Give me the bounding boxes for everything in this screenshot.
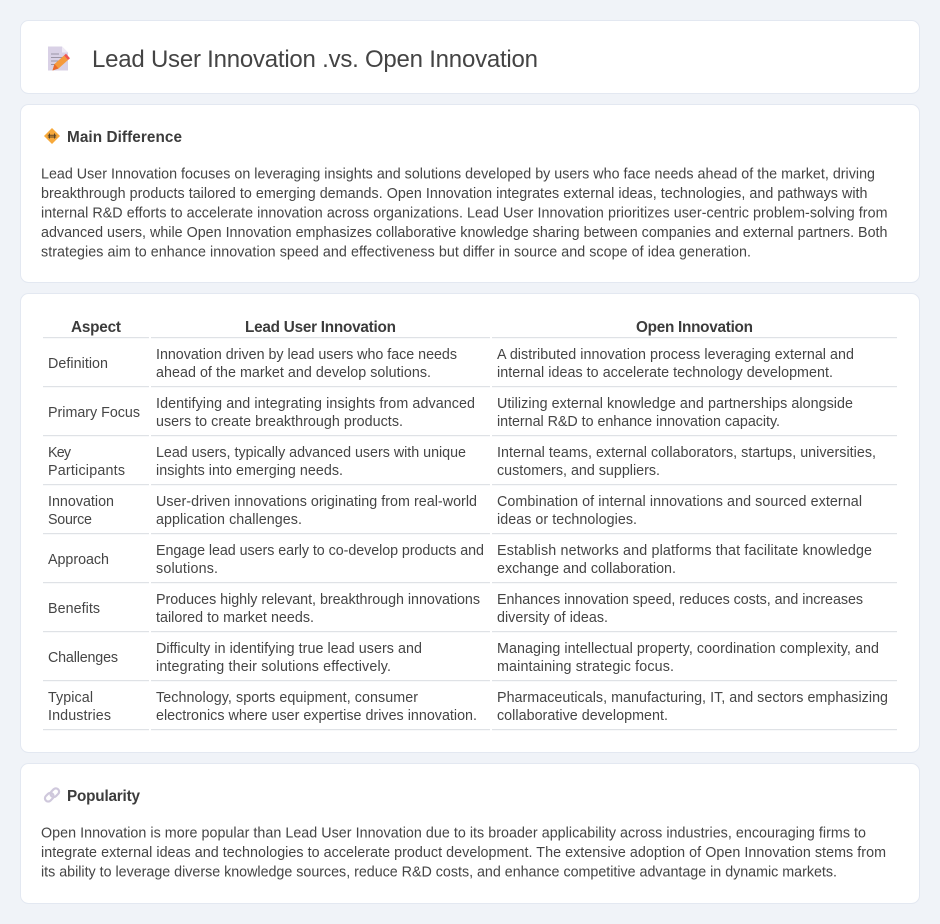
table row: approach bbox=[43, 543, 897, 583]
table row: definition bbox=[43, 347, 897, 387]
table row: typical industries bbox=[43, 690, 897, 730]
table row: typical industries: Pharmaceuticals, manufacturing, IT, and sectors emphasizing bbox=[497, 690, 888, 706]
text block: popularity: Open Innovation is more popular than Lead User Innovation due to its broader applicability across industries, encouraging firms to bbox=[41, 826, 866, 842]
table row: benefits: Benefits bbox=[48, 601, 100, 617]
table row: typical industries: Technology, sports equipment, consumer bbox=[156, 690, 418, 706]
text block: main difference: breakthrough products tailored to emerging demands. Open Innovation integrates external ideas, technologies, and pathways with bbox=[41, 186, 868, 202]
table row: key participants: insights into emerging needs. bbox=[156, 463, 343, 479]
table row: primary focus: Identifying and integrating insights from advanced bbox=[156, 396, 475, 412]
text block: popularity: integrate external ideas and technologies to accelerate product development. The extensive adoption of Open Innovation stems from bbox=[41, 845, 886, 861]
table row: innovation source: User-driven innovations originating from real-world bbox=[156, 494, 477, 510]
table row: benefits: Produces highly relevant, breakthrough innovations bbox=[156, 592, 480, 608]
text block: main difference: internal R&D efforts to accelerate innovation across organizations. Lead User Innovation prioritizes user-centric problem-solving from bbox=[41, 206, 888, 222]
table header row bbox=[43, 319, 897, 338]
text block: main difference bbox=[41, 166, 888, 260]
table row: definition: internal ideas to accelerate technology development. bbox=[497, 365, 833, 381]
text block: main difference: Lead User Innovation focuses on leveraging insights and solutions developed by users who face needs ahead of the market, driving bbox=[41, 166, 875, 182]
title: Lead User Innovation .vs. Open Innovation bbox=[92, 46, 538, 73]
table row: approach: Establish networks and platforms that facilitate knowledge bbox=[497, 543, 872, 559]
icon: document with pencil bbox=[48, 46, 70, 70]
table row: key participants: Key bbox=[48, 445, 72, 461]
heading: popularity: Popularity bbox=[67, 788, 140, 805]
table row: innovation source: Combination of internal innovations and sourced external bbox=[497, 494, 862, 510]
table row: challenges: Challenges bbox=[48, 650, 118, 666]
table row: typical industries: Typical bbox=[48, 690, 93, 706]
table row: primary focus: Utilizing external knowledge and partnerships alongside bbox=[497, 396, 853, 412]
table row: primary focus: internal R&D to enhance innovation capacity. bbox=[497, 414, 780, 430]
table row: key participants bbox=[43, 445, 897, 485]
table row: benefits: diversity of ideas. bbox=[497, 610, 608, 626]
table row: innovation source: ideas or technologies. bbox=[497, 512, 637, 528]
table row: benefits: Enhances innovation speed, reduces costs, and increases bbox=[497, 592, 863, 608]
table row: approach: exchange and collaboration. bbox=[497, 561, 676, 577]
heading: main difference: Main Difference bbox=[67, 129, 182, 146]
table row: key participants: customers, and suppliers. bbox=[497, 463, 660, 479]
table row: approach: Engage lead users early to co-develop products and bbox=[156, 543, 484, 559]
panel: comparison table bbox=[20, 294, 920, 752]
panel: popularity bbox=[20, 764, 920, 904]
table row: innovation source: Source bbox=[48, 512, 92, 528]
table row: challenges: integrating their solutions effectively. bbox=[156, 659, 391, 675]
table row: challenges bbox=[43, 641, 897, 681]
table row: typical industries: collaborative development. bbox=[497, 708, 668, 724]
table row: key participants: Internal teams, external collaborators, startups, universities, bbox=[497, 445, 876, 461]
text block: main difference: advanced users, while Open Innovation emphasizes collaborative knowledge sharing between companies and external partners. Both bbox=[41, 225, 888, 241]
panel: main difference bbox=[20, 104, 920, 282]
table row: approach: Approach bbox=[48, 552, 109, 568]
table row: challenges: Managing intellectual property, coordination complexity, and bbox=[497, 641, 879, 657]
table row: definition: ahead of the market and develop solutions. bbox=[156, 365, 431, 381]
table row: typical industries: electronics where user expertise drives innovation. bbox=[156, 708, 477, 724]
table row: approach: solutions. bbox=[156, 561, 218, 577]
table row: challenges: Difficulty in identifying true lead users and bbox=[156, 641, 422, 657]
text block: main difference: strategies aim to enhance innovation speed and effectiveness but differ in source and scope of idea generation. bbox=[41, 244, 751, 260]
table row: innovation source: Innovation bbox=[48, 494, 114, 510]
icon: chain link bbox=[44, 787, 60, 803]
table row: benefits: tailored to market needs. bbox=[156, 610, 314, 626]
table row: primary focus bbox=[43, 396, 897, 436]
table row: primary focus: Primary Focus bbox=[48, 405, 140, 421]
table row: innovation source bbox=[43, 494, 897, 534]
table header row: Lead User Innovation bbox=[245, 319, 396, 336]
text block: popularity bbox=[41, 826, 886, 880]
table row: key participants: Lead users, typically advanced users with unique bbox=[156, 445, 466, 461]
table row: benefits bbox=[43, 592, 897, 632]
icon: warning diamond bbox=[44, 128, 60, 144]
table row: challenges: maintaining strategic focus. bbox=[497, 659, 674, 675]
panel: title header bbox=[20, 20, 920, 94]
table header row: Aspect bbox=[71, 319, 121, 336]
table row: key participants: Participants bbox=[48, 463, 125, 479]
table row: definition: Definition bbox=[48, 356, 108, 372]
text block: popularity: its ability to leverage diverse knowledge sources, reduce R&D costs, and enhance competitive advantage in dynamic markets. bbox=[41, 864, 837, 880]
table header row: Open Innovation bbox=[636, 319, 753, 336]
table row: definition: A distributed innovation process leveraging external and bbox=[497, 347, 854, 363]
table row: innovation source: application challenges. bbox=[156, 512, 302, 528]
table row: primary focus: users to create breakthrough products. bbox=[156, 414, 403, 430]
table row: definition: Innovation driven by lead users who face needs bbox=[156, 347, 457, 363]
table row: typical industries: Industries bbox=[48, 708, 111, 724]
